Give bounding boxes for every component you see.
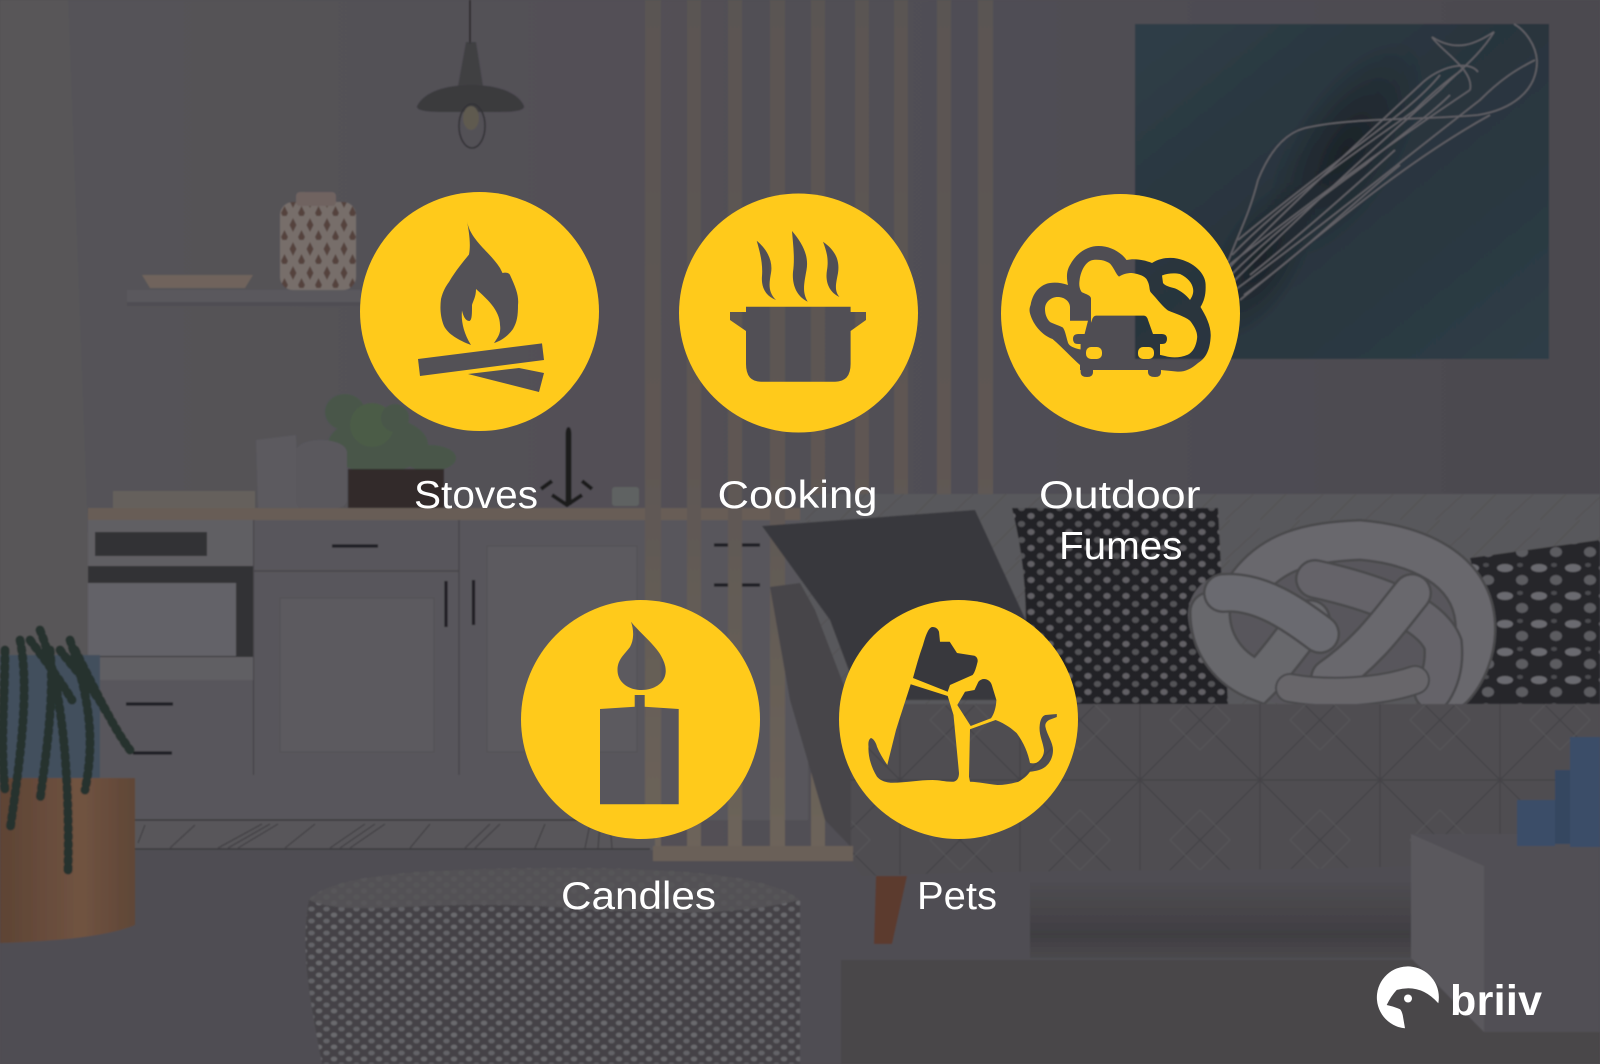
- white jugs: [256, 435, 347, 508]
- logo bird mark: [1377, 966, 1439, 1028]
- pendant lamp: [417, 0, 524, 148]
- label: outdoor fumes: [1039, 474, 1201, 568]
- label: stoves: Stoves: [414, 474, 538, 517]
- sofa leg: [874, 876, 907, 944]
- patterned cushion: [1460, 540, 1600, 704]
- label: cooking: Cooking: [718, 474, 878, 517]
- wood slats: [645, 0, 993, 860]
- knot pillow: [1188, 529, 1483, 704]
- herb plant in pot: [325, 394, 456, 509]
- sofa arm: [770, 583, 851, 847]
- icon badge: outdoor fumes: [1001, 194, 1240, 433]
- label: pets: Pets: [917, 875, 997, 918]
- label: candles: Candles: [561, 875, 716, 918]
- blue candles: [1517, 737, 1600, 847]
- shelf with basket: [127, 275, 362, 306]
- faucet: [567, 428, 570, 505]
- icon badge: cooking: [679, 194, 918, 432]
- kitchen cabinets: [88, 520, 808, 820]
- logo wordmark: briiv: [1450, 977, 1542, 1025]
- logo eye: [1404, 994, 1412, 1002]
- dark cushion: [762, 510, 1028, 700]
- logo: briiv: [1377, 966, 1542, 1028]
- countertop: [88, 508, 808, 520]
- wall column left: [0, 0, 88, 850]
- bobble cushion: [1012, 508, 1228, 704]
- slat base: [653, 846, 853, 861]
- floor rug: [841, 960, 1600, 1064]
- shadow under sofa: [1030, 880, 1415, 958]
- oven: [88, 520, 253, 680]
- runner rug strip: [135, 820, 680, 850]
- side table: [1411, 834, 1600, 1032]
- icon badge: stoves: [360, 192, 599, 431]
- label: outdoor fumes: Fumes: [1059, 525, 1182, 568]
- hanging vine: [3, 630, 130, 870]
- wood stool: [0, 778, 135, 943]
- icon badge: candles: [521, 600, 760, 839]
- lantern vase: [280, 192, 356, 290]
- cup: [612, 487, 639, 506]
- sofa back: [800, 494, 1600, 704]
- woven tray: [113, 491, 255, 508]
- icon badge: pets: [839, 600, 1078, 839]
- floor: [0, 850, 1600, 1064]
- knitted pouf: [306, 868, 800, 1064]
- label: outdoor fumes: Outdoor: [1039, 474, 1201, 517]
- wall art: [1135, 15, 1549, 359]
- sofa seat: [850, 704, 1600, 876]
- faucet handles: [541, 481, 592, 505]
- blue vase behind vine: [0, 655, 100, 778]
